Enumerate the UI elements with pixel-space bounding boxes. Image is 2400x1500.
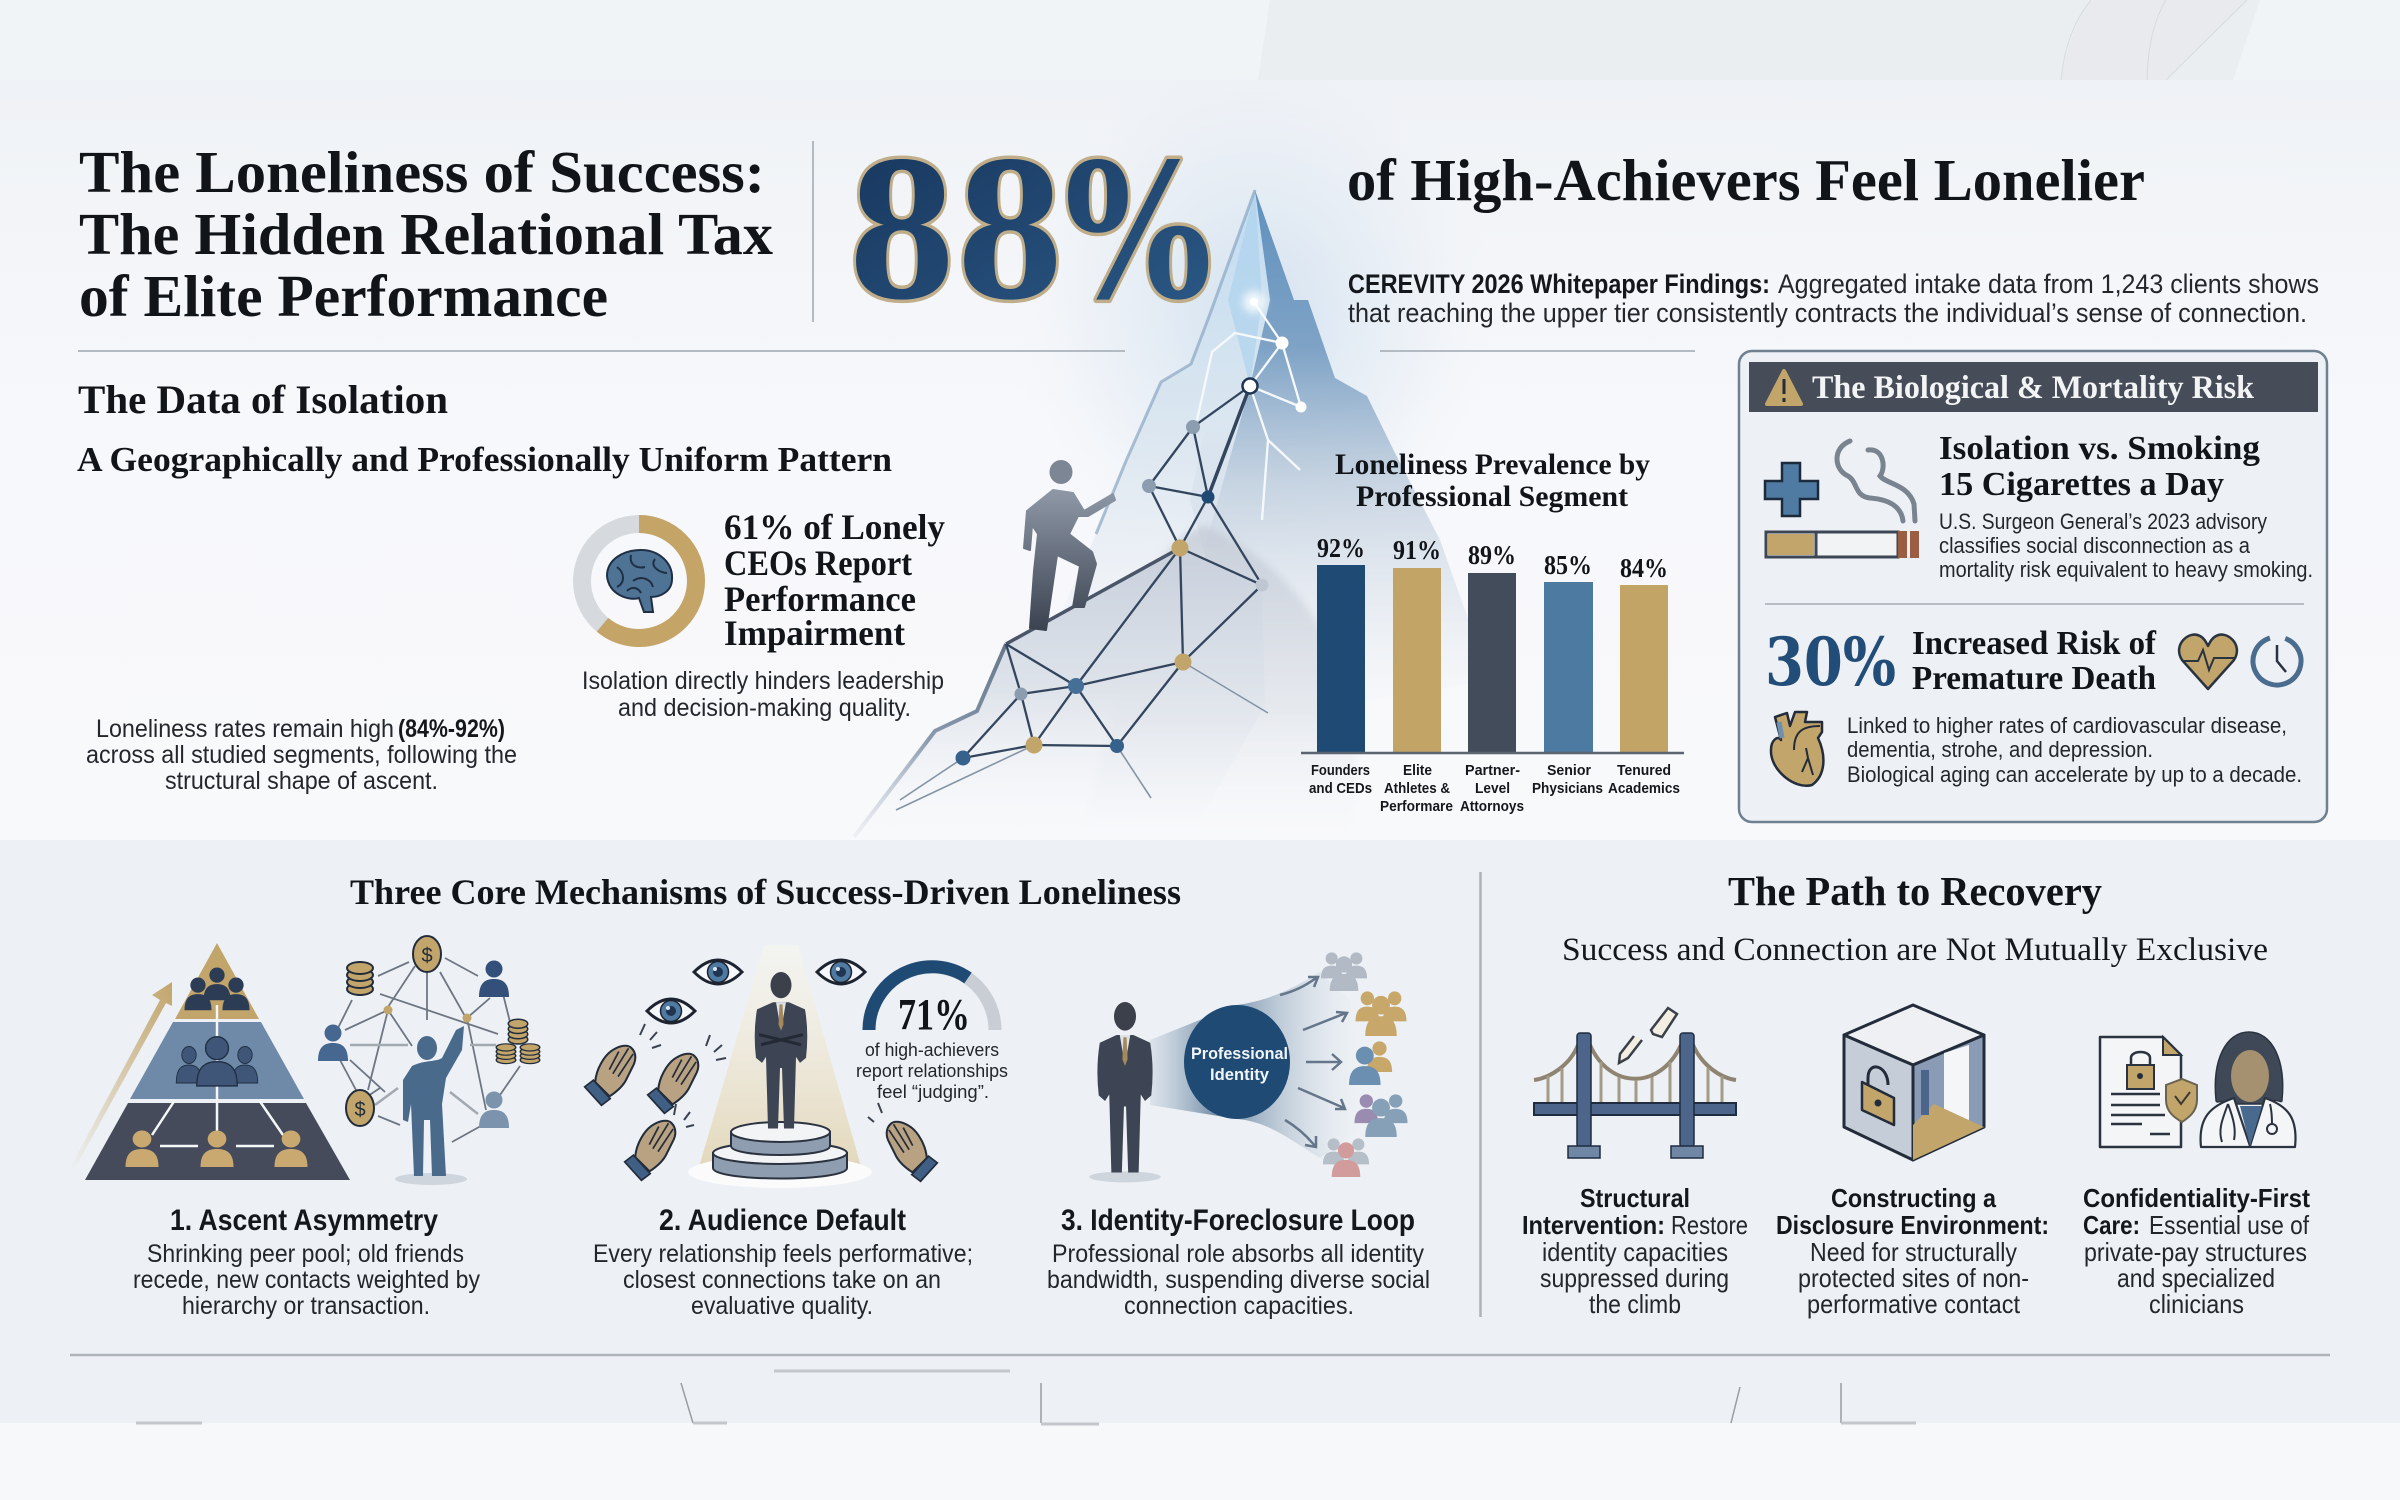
premature death heading: Increased Risk of <box>1912 625 2157 662</box>
transaction network <box>318 936 540 1142</box>
bar values: 89% <box>1468 540 1516 570</box>
mechanism 2 text <box>593 1204 973 1320</box>
bar values: 91% <box>1393 535 1441 565</box>
health description: Biological aging can accelerate by up to a decade. <box>1847 762 2302 787</box>
bar labels: Performare <box>1380 798 1453 815</box>
mechanism 1 text: hierarchy or transaction. <box>182 1292 430 1320</box>
bar labels: Founders <box>1311 762 1370 779</box>
61% stat description <box>582 667 944 722</box>
gauge 71%: report relationships <box>856 1061 1008 1081</box>
mechanism 3 text: bandwidth, suspending diverse social <box>1047 1266 1430 1294</box>
whitepaper intro text <box>1348 269 2319 328</box>
mechanism 1 text <box>133 1204 480 1320</box>
chart title <box>1335 448 1650 513</box>
61% stat heading: 61% of Lonely <box>724 507 945 547</box>
whitepaper intro text: that reaching the upper tier consistently contracts the individual’s sense of connection. <box>1348 298 2307 328</box>
mechanism 1 text: Shrinking peer pool; old friends <box>147 1240 464 1268</box>
gauge 71%: feel “judging”. <box>877 1082 989 1102</box>
donut chart with brain icon <box>582 524 696 638</box>
climber figure <box>1024 460 1115 630</box>
recovery text: structural intervention: Intervention: <box>1522 1210 1665 1240</box>
bar labels: Attornoys <box>1460 798 1524 815</box>
title <box>79 139 773 329</box>
loneliness range note: structural shape of ascent. <box>165 767 438 795</box>
smoking heading: Isolation vs. Smoking <box>1939 430 2260 467</box>
bar labels: Physicians <box>1532 780 1603 797</box>
icon: bridge with broken chain <box>1534 1008 1736 1158</box>
mechanism 2 text: closest connections take on an <box>623 1266 941 1294</box>
title: The Hidden Relational Tax <box>79 201 773 267</box>
61% stat heading: CEOs Report <box>724 543 912 583</box>
61% stat heading <box>724 507 945 653</box>
whitepaper intro text: Aggregated intake data from 1,243 clients shows <box>1778 269 2319 299</box>
bar labels: Level <box>1475 780 1510 797</box>
recovery text: structural intervention: Restore <box>1671 1210 1748 1240</box>
loneliness range note: across all studied segments, following the <box>86 741 517 769</box>
beam fans <box>1150 972 1360 1158</box>
mechanism 3 text: 3. Identity-Foreclosure Loop <box>1061 1204 1415 1237</box>
recovery text: disclosure environment: Constructing a <box>1831 1183 1996 1213</box>
icon: clock <box>2246 630 2308 692</box>
professional identity circle <box>1184 1005 1290 1119</box>
health description: Linked to higher rates of cardiovascular disease, <box>1847 713 2287 738</box>
bar values: 92% <box>1317 533 1365 563</box>
gauge 71%: of high-achievers <box>865 1040 999 1060</box>
recovery text: confidentiality first care: private-pay structures <box>2084 1237 2307 1267</box>
icon: anatomical heart <box>1771 712 1823 786</box>
recovery text: confidentiality first care: Essential use of <box>2149 1210 2310 1240</box>
heading: three core mechanisms: Three Core Mechanisms of Success-Driven Loneliness <box>350 872 1181 912</box>
loneliness range note: (84%-92%) <box>398 715 505 743</box>
recovery text: disclosure environment <box>1776 1183 2049 1319</box>
gauge 71%: 71% <box>898 990 970 1039</box>
icon: heartbeat <box>2179 635 2237 689</box>
recovery heading: The Path to Recovery <box>1728 868 2102 914</box>
smoking heading: 15 Cigarettes a Day <box>1939 466 2224 503</box>
gauge 71% <box>856 967 1008 1102</box>
smoking description: mortality risk equivalent to heavy smoking. <box>1939 557 2313 582</box>
30% stat: 30% <box>1765 623 1896 701</box>
pyramid <box>85 943 350 1180</box>
risk header <box>1749 362 2318 412</box>
chart title: Loneliness Prevalence by <box>1335 448 1650 481</box>
recovery text: confidentiality first care: Care: <box>2083 1210 2140 1240</box>
professional identity circle: Professional <box>1191 1044 1288 1063</box>
61% stat heading: Impairment <box>724 613 905 653</box>
bar labels: Tenured <box>1617 762 1671 779</box>
panel: bar chart <box>1301 448 1684 815</box>
recovery text: disclosure environment: Need for structurally <box>1810 1237 2017 1267</box>
mechanism 3 text <box>1047 1204 1430 1320</box>
recovery text: confidentiality first care <box>2083 1183 2310 1319</box>
people groups <box>1321 952 1408 1177</box>
smoking description: U.S. Surgeon General’s 2023 advisory <box>1939 509 2267 534</box>
icon: protected room box <box>1844 1005 1984 1160</box>
61% stat description: and decision-making quality. <box>618 694 911 722</box>
title: of Elite Performance <box>79 263 608 329</box>
mechanism 1 text: 1. Ascent Asymmetry <box>170 1204 438 1237</box>
icons: watching eyes <box>647 960 865 1023</box>
premature death heading: Premature Death <box>1912 660 2156 697</box>
reaching figure <box>395 1026 467 1185</box>
icon: brain <box>607 550 672 612</box>
recovery text: confidentiality first care: clinicians <box>2149 1289 2244 1319</box>
mechanism 1 text: recede, new contacts weighted by <box>133 1266 480 1294</box>
health description <box>1847 713 2302 787</box>
section heading: data of isolation <box>77 377 892 479</box>
growth arrow <box>70 982 172 1170</box>
recovery text: structural intervention: the climb <box>1589 1289 1681 1319</box>
icons: clapping hands <box>581 1024 941 1186</box>
mountain illustration with network and climber <box>850 50 1495 840</box>
bar values <box>1317 533 1668 583</box>
mechanism 3 text: connection capacities. <box>1124 1292 1354 1320</box>
bar labels <box>1309 762 1680 815</box>
section heading: data of isolation: The Data of Isolation <box>78 377 448 422</box>
icon: smoke <box>1837 441 1915 521</box>
vertical divider and footer rule <box>70 872 2330 1355</box>
recovery text: disclosure environment: performative contact <box>1807 1289 2021 1319</box>
loneliness range note: Loneliness rates remain high <box>96 715 394 743</box>
health description: dementia, strohe, and depression. <box>1847 737 2153 762</box>
title: The Loneliness of Success: <box>79 139 765 205</box>
recovery text: disclosure environment: Disclosure Environment: <box>1776 1210 2049 1240</box>
bar labels: Elite <box>1403 762 1432 779</box>
chart title: Professional Segment <box>1356 480 1628 513</box>
spotlight and podium <box>688 945 872 1188</box>
bar values: 84% <box>1620 553 1668 583</box>
bar labels: Athletes & <box>1384 780 1450 797</box>
section heading: data of isolation: A Geographically and Professionally Uniform Pattern <box>77 440 892 479</box>
bar values: 85% <box>1544 550 1592 580</box>
bar labels: Partner- <box>1465 762 1520 779</box>
recovery text: structural intervention: suppressed during <box>1540 1263 1729 1293</box>
icon: doctor <box>2201 1032 2296 1147</box>
mechanism 2 text: Every relationship feels performative; <box>593 1240 973 1268</box>
businessman <box>1089 1002 1161 1182</box>
businessman on podium <box>755 972 807 1129</box>
bar labels: Senior <box>1547 762 1591 779</box>
transaction network: $ <box>421 945 433 967</box>
mechanism 2 text: 2. Audience Default <box>659 1204 906 1237</box>
recovery text: structural intervention <box>1522 1183 1748 1319</box>
header divider <box>78 141 1695 351</box>
smoking description <box>1939 509 2313 582</box>
premature death heading <box>1912 625 2157 697</box>
mechanism 3 text: Professional role absorbs all identity <box>1052 1240 1424 1268</box>
whitepaper intro text: CEREVITY 2026 Whitepaper Findings: <box>1348 269 1770 299</box>
headline: of High-Achievers Feel Lonelier <box>1347 147 2145 213</box>
mechanism 3: identity foreclosure loop <box>1047 952 1430 1320</box>
icon: confidential document <box>2100 1037 2197 1147</box>
big statistic 88%: 88% <box>848 122 1212 341</box>
bars <box>1301 565 1684 753</box>
61% stat description: Isolation directly hinders leadership <box>582 667 944 695</box>
panel: biological and mortality risk <box>1739 351 2327 822</box>
recovery text: confidentiality first care: Confidentiality-First <box>2083 1183 2310 1213</box>
transaction network: $ <box>354 1099 366 1121</box>
recovery text: structural intervention: Structural <box>1580 1183 1690 1213</box>
61% stat heading: Performance <box>724 579 916 619</box>
recovery text: disclosure environment: protected sites of non- <box>1798 1263 2029 1293</box>
professional identity circle: Identity <box>1210 1065 1270 1084</box>
recovery text: confidentiality first care: and specialized <box>2117 1263 2275 1293</box>
mechanism 1: ascent asymmetry <box>70 936 540 1320</box>
mechanism 2 text: evaluative quality. <box>691 1292 873 1320</box>
arrows <box>1280 977 1347 1147</box>
smoking description: classifies social disconnection as a <box>1939 533 2251 558</box>
panel: path to recovery <box>1522 868 2310 1319</box>
icon: cigarette <box>1766 531 1919 558</box>
icon: medical cross <box>1765 463 1818 516</box>
risk header: The Biological & Mortality Risk <box>1812 370 2255 406</box>
bar labels: Academics <box>1608 780 1680 797</box>
recovery text: structural intervention: identity capacities <box>1542 1237 1728 1267</box>
recovery subheading: Success and Connection are Not Mutually Exclusive <box>1562 932 2268 968</box>
loneliness range note <box>86 715 517 795</box>
smoking heading <box>1939 430 2260 503</box>
bar labels: and CEDs <box>1309 780 1372 797</box>
mechanism 2: audience default <box>581 945 1008 1320</box>
